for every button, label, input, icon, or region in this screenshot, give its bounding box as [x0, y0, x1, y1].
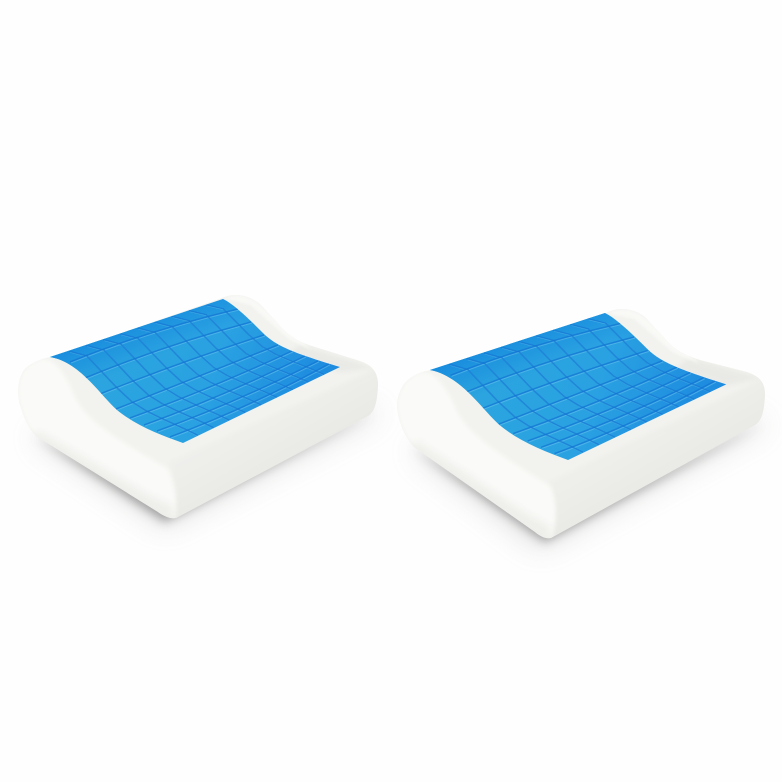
gel pad: right [418, 306, 728, 462]
pillow: left [18, 295, 385, 528]
pillow body: left [18, 295, 382, 525]
shadow: left pillow [30, 400, 385, 528]
shadow: right pillow [410, 410, 772, 550]
pillow body: right [397, 309, 768, 545]
pillow: right [397, 306, 772, 550]
gel pad: left [40, 295, 340, 443]
